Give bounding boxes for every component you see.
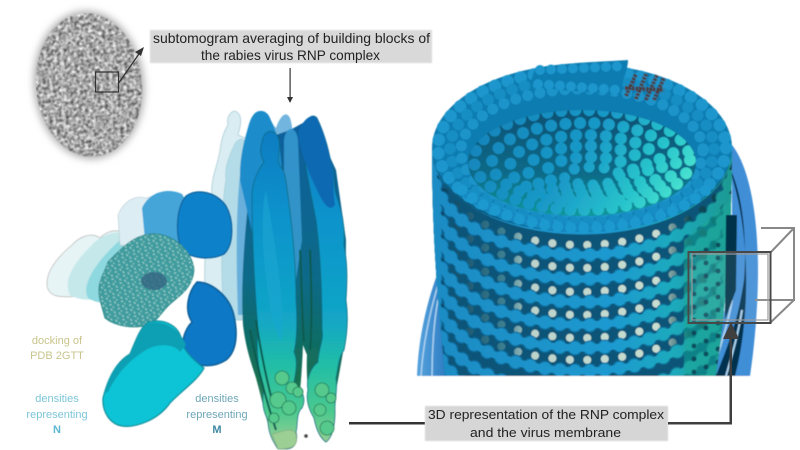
- M label: M: [212, 424, 222, 436]
- right column: [301, 116, 347, 442]
- connector: M density to bottom label: [349, 422, 425, 424]
- dark slit at right: [725, 215, 737, 320]
- ghost layers: [205, 111, 252, 320]
- arrow: box to label: [118, 47, 144, 84]
- N label: representing: [26, 409, 88, 421]
- teal side panel: [684, 208, 726, 376]
- dark blue top of right column: [298, 116, 335, 208]
- label: subtomogram averaging: the rabies virus RNP complex: [201, 48, 380, 63]
- densities representing M: [205, 111, 347, 449]
- virus capsule outline: [60, 33, 113, 140]
- tomogram: virus particle: [28, 6, 150, 164]
- label: subtomogram averaging: subtomogram averaging of building blocks of: [153, 31, 430, 46]
- cylinder body: [432, 148, 732, 376]
- docking label: PDB 2GTT: [30, 350, 84, 362]
- wireframe cube: [688, 228, 794, 323]
- label: 3D representation: [425, 406, 668, 441]
- pale green tail: [272, 430, 297, 449]
- M label: densities: [195, 393, 239, 405]
- dark streaks lower: [250, 250, 312, 430]
- atomic model: [625, 74, 664, 100]
- M label: [186, 393, 248, 436]
- column highlight: [263, 190, 282, 340]
- helical rows: [431, 154, 733, 376]
- tip of helix: [530, 60, 628, 95]
- mesh: docking of PDB 2GTT: [99, 234, 194, 327]
- dark backing strands: [242, 118, 346, 436]
- N label: [26, 393, 88, 436]
- tomogram grey ellipse: [28, 6, 150, 164]
- blue upper blob: [177, 192, 232, 258]
- label: 3D representation: 3D representation of the RNP complex: [428, 407, 664, 422]
- label: subtomogram averaging: [150, 30, 432, 63]
- selection box: [96, 72, 118, 92]
- blue lower blob: [182, 282, 236, 366]
- ghost lobes: [47, 231, 132, 300]
- 3D RNP complex and membrane: [416, 59, 759, 377]
- labels: docking and densities: [26, 335, 248, 436]
- interior bead rows: [474, 110, 690, 210]
- cyan blob: [103, 321, 204, 426]
- membrane: [417, 272, 450, 376]
- front left column: [252, 131, 304, 449]
- arrow: label to densities: [287, 68, 293, 103]
- front square: [688, 252, 770, 323]
- docking label: docking of: [32, 335, 83, 347]
- N label: densities: [35, 393, 79, 405]
- front rim band: [462, 190, 706, 228]
- ghost lobes upper: [118, 192, 200, 250]
- back square: [755, 228, 794, 300]
- rim and interior: [432, 64, 732, 232]
- N label: N: [53, 424, 61, 436]
- label: 3D representation: and the virus membrane: [470, 425, 621, 440]
- rim beads: [438, 70, 726, 226]
- arrow: bottom label to cube: [668, 322, 739, 424]
- green beads: [269, 371, 336, 435]
- densities representing N: [47, 191, 236, 426]
- docking label: [30, 335, 84, 362]
- mid-blue lump: [284, 129, 302, 320]
- white strip below: cover: [410, 376, 770, 380]
- lump behind front column: [240, 111, 284, 240]
- M label: representing: [186, 409, 248, 421]
